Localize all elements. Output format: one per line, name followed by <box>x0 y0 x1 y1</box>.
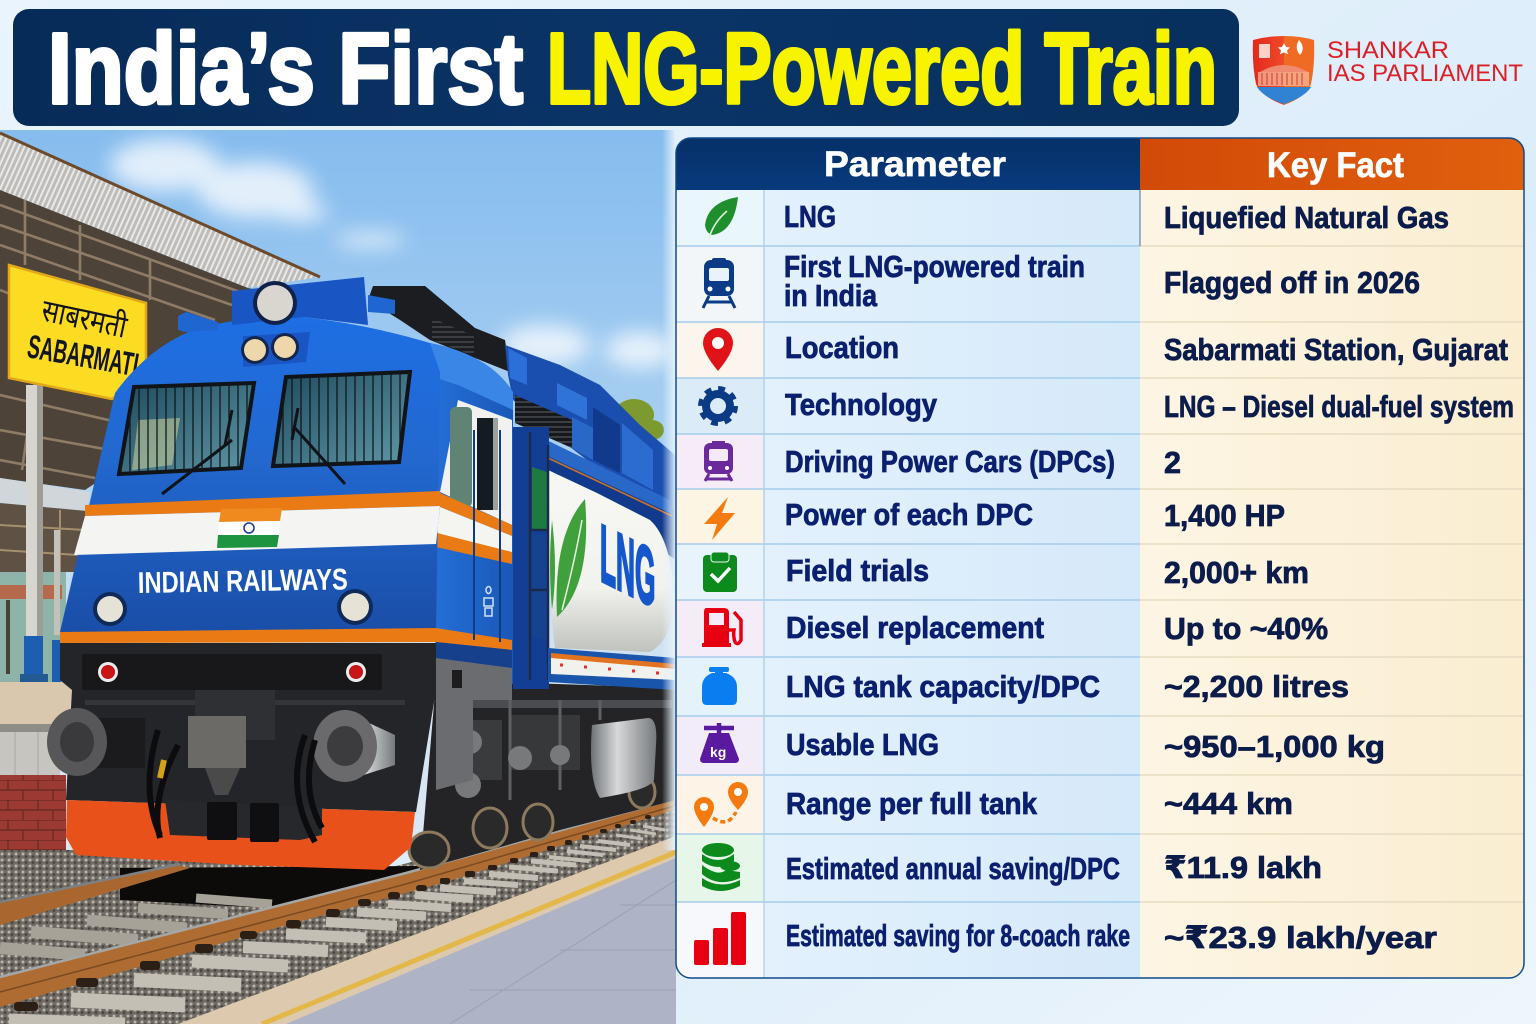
far track sleepers <box>0 898 272 955</box>
row: range: Range per full tank <box>786 786 1038 821</box>
silver fuel tank <box>591 718 656 798</box>
row: technology: Technology <box>785 387 938 422</box>
orange plough <box>66 800 415 870</box>
title: yellow part: LNG-Powered Train <box>547 13 1217 125</box>
loco front body <box>60 277 440 643</box>
stripes and flag band <box>85 491 440 516</box>
icon: route <box>694 782 748 827</box>
title banner <box>13 9 1239 126</box>
logo shield <box>1253 36 1314 105</box>
row: 8-coach rake saving: Estimated saving for 8-coach rake <box>786 918 1130 953</box>
row: LNG <box>784 199 1449 235</box>
INDIAN RAILWAYS text: INDIAN RAILWAYS <box>138 563 348 600</box>
tank leaf <box>550 499 586 617</box>
sign Hindi name: साबरमती <box>39 293 131 345</box>
loco undercarriage side <box>409 680 676 870</box>
icon: bar chart <box>694 912 746 965</box>
row: location <box>785 330 1508 367</box>
row: tank capacity: LNG tank capacity/DPC <box>786 669 1100 704</box>
row: first LNG-powered train: Flagged off in 2026 <box>1164 265 1420 300</box>
table header: Key Fact <box>1140 138 1524 190</box>
rail clips <box>14 815 651 1011</box>
row: technology <box>785 387 1514 424</box>
icon: gear <box>701 389 735 423</box>
row: annual saving: ₹11.9 lakh <box>1164 850 1322 885</box>
LNG tank <box>548 470 674 652</box>
window: right <box>273 372 410 484</box>
row: field trials: Field trials <box>786 553 929 588</box>
row: diesel replacement <box>786 610 1328 646</box>
walkway beam <box>549 441 672 514</box>
clouds <box>110 139 675 368</box>
near rail <box>0 800 674 1007</box>
row: tank capacity <box>786 669 1349 704</box>
sky <box>0 130 676 850</box>
lower stripe on side <box>548 648 676 690</box>
hoses <box>149 730 322 842</box>
row: usable LNG: Usable LNG <box>786 727 939 762</box>
icon: lightning bolt <box>704 497 735 540</box>
top roof box <box>232 277 368 325</box>
row: power of each DPC: 1,400 HP <box>1164 498 1285 533</box>
icon: weight kg <box>700 723 739 763</box>
row: usable LNG: ~950–1,000 kg <box>1164 729 1385 764</box>
row: driving power cars: 2 <box>1164 445 1181 480</box>
platform and brick edge <box>0 682 75 853</box>
row: diesel replacement: Up to ~40% <box>1164 611 1328 646</box>
row: field trials <box>786 553 1309 590</box>
panel: parameter / key fact table <box>676 138 1524 978</box>
horns <box>178 312 218 332</box>
icon: fuel pump <box>702 608 741 647</box>
gap behind walkway <box>549 456 675 559</box>
side ladder column <box>513 427 549 689</box>
far rail <box>0 865 190 925</box>
station background <box>0 572 66 682</box>
header text: Parameter: Parameter <box>824 145 1006 184</box>
row: range: ~444 km <box>1164 786 1293 821</box>
logo text line 1: SHANKAR <box>1327 37 1449 64</box>
tree <box>619 399 664 440</box>
row: first LNG-powered train: First LNG-powered train <box>784 249 1085 284</box>
row: annual saving: Estimated annual saving/DPC <box>786 851 1120 886</box>
tank LNG lettering: LNG <box>600 507 655 625</box>
ballast <box>0 795 676 1024</box>
wheels <box>409 730 655 868</box>
photo: locomotive at Sabarmati station <box>0 130 700 1024</box>
row: usable LNG <box>786 727 1385 764</box>
table header: Parameter <box>676 138 1140 190</box>
loco black lower front <box>47 643 436 812</box>
row: first LNG-powered train <box>784 249 1420 313</box>
Indian flag <box>217 508 282 548</box>
station sign <box>9 265 146 399</box>
header text: Key Fact: Key Fact <box>1267 146 1404 185</box>
headlamp cluster <box>241 281 310 367</box>
lower headlights <box>93 589 373 626</box>
icon: coin stack <box>702 843 740 891</box>
coupler <box>188 690 275 795</box>
icon: train <box>703 258 735 308</box>
row: range <box>786 786 1293 821</box>
logo: Shankar IAS Parliament <box>1253 36 1523 105</box>
sign English name: SABARMATI <box>25 327 142 383</box>
left buffer <box>47 708 145 776</box>
icon: LNG tank <box>702 667 737 705</box>
row: tank capacity: ~2,200 litres <box>1164 669 1349 704</box>
icon: purple train <box>704 441 733 481</box>
row: LNG: LNG <box>784 199 836 234</box>
icon: clipboard check <box>703 552 737 592</box>
row: driving power cars: Driving Power Cars (DPCs) <box>785 444 1115 479</box>
door emblem <box>484 587 493 616</box>
platform columns <box>20 385 61 682</box>
row: first LNG-powered train: in India <box>784 278 878 313</box>
title: white part: India’s First <box>48 13 523 125</box>
window: left <box>119 383 254 494</box>
row: LNG: Liquefied Natural Gas <box>1164 200 1449 235</box>
platform foreground <box>178 836 700 1024</box>
row: diesel replacement: Diesel replacement <box>786 610 1044 645</box>
right edge fade <box>662 130 676 850</box>
icon: weight kg: kg <box>710 744 726 760</box>
row: field trials: 2,000+ km <box>1164 555 1309 590</box>
platform canopy <box>0 133 320 572</box>
row: location: Location <box>785 330 899 365</box>
cab side <box>430 343 513 790</box>
icon: location pin <box>703 328 733 371</box>
row: power of each DPC: Power of each DPC <box>785 497 1033 532</box>
column backgrounds <box>676 190 764 978</box>
row: power of each DPC <box>785 497 1285 533</box>
shadow under locomotive <box>120 795 676 908</box>
marker lights <box>98 662 366 682</box>
near track sleepers <box>9 826 665 1024</box>
right buffer <box>313 710 395 782</box>
lower orange stripe <box>60 628 436 643</box>
logo text line 2: IAS PARLIAMENT <box>1327 60 1523 87</box>
row: 8-coach rake saving: ~₹23.9 lakh/year <box>1164 920 1437 955</box>
roof equipment <box>368 286 676 510</box>
icon: leaf <box>705 197 738 238</box>
